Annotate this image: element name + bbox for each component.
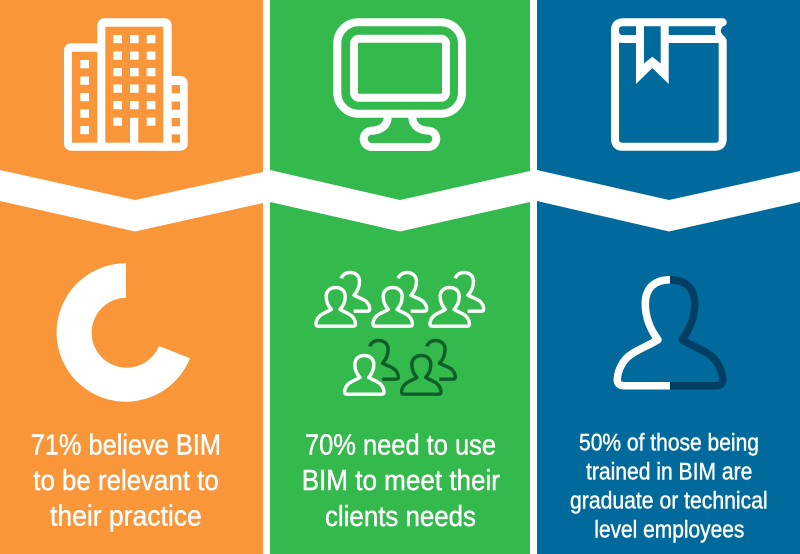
text: 50% statement: level employees [594,517,744,544]
text: 70% statement: clients needs [325,501,476,533]
text: 70% statement [302,429,500,533]
icon: people group, seven of ten highlighted [316,272,484,394]
text: 70% statement: 70% need to use [305,429,496,461]
text: 50% statement: trained in BIM are [586,458,752,486]
text: 71% statement: 71% believe BIM [31,429,221,461]
donut chart: 71% [57,263,190,402]
text: 71% statement: to be relevant to [33,465,219,497]
text: 71% statement [31,429,221,532]
text: 71% statement: their practice [50,500,202,532]
icon: monitor [337,22,462,147]
panel: green [270,0,530,554]
chevron band: orange [0,170,263,232]
text: 50% statement: graduate or technical [570,488,768,514]
chevron band: blue [537,170,800,232]
icon: book with bookmark [615,22,723,147]
text: 50% statement [570,430,768,544]
panel: blue [537,0,800,554]
text: 50% statement: 50% of those being [579,430,759,457]
chevron band: green [270,170,530,232]
panel: orange [0,0,263,554]
icon: person half highlighted [617,280,723,386]
text: 70% statement: BIM to meet their [302,465,500,497]
icon: buildings [64,18,188,151]
